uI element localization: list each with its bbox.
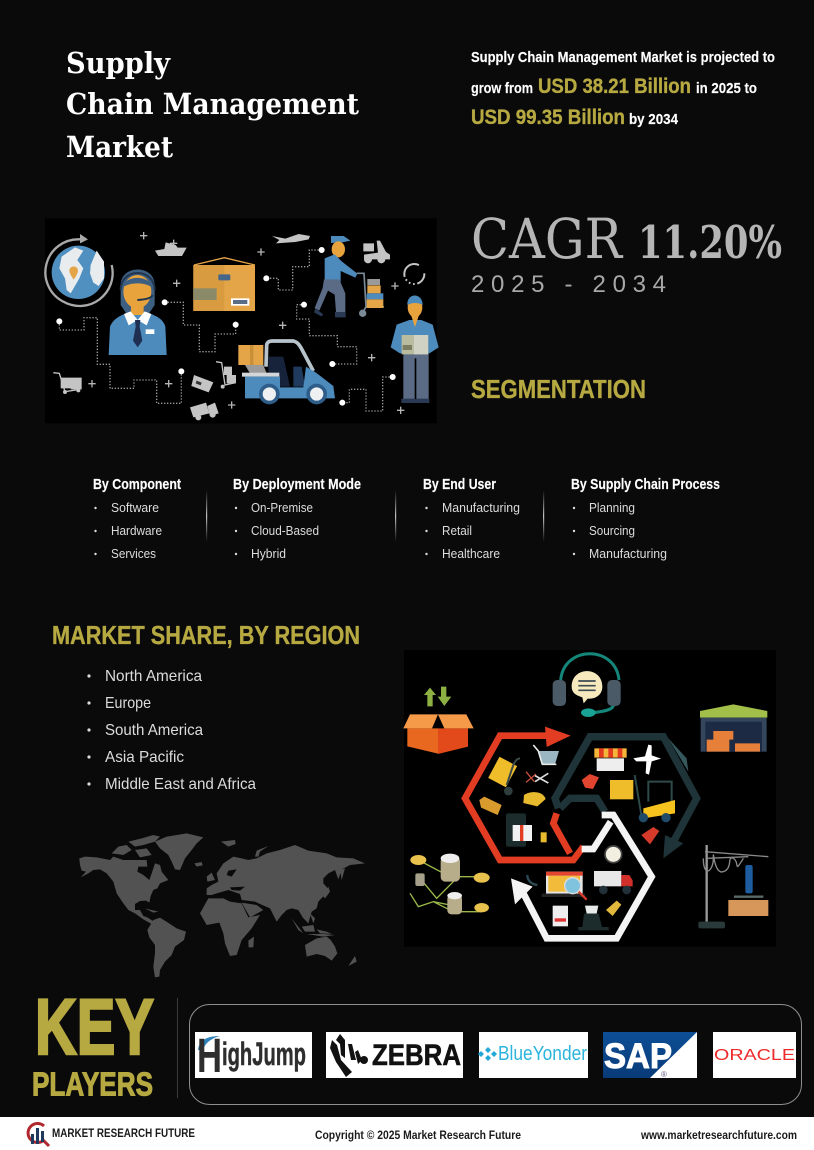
column: by deployment mode: By Deployment Mode — [233, 476, 361, 493]
logo: SAP: ® — [661, 1070, 667, 1079]
column: by end user: Manufacturing — [442, 500, 520, 515]
title: Chain Management — [66, 87, 360, 121]
column: by deployment mode: Cloud-Based — [251, 523, 319, 538]
title: Supply — [66, 46, 171, 80]
icons: retail cart and parcels — [479, 745, 559, 847]
hexagon arrow: white — [511, 815, 652, 938]
column: by supply chain process: By Supply Chain Process — [571, 476, 720, 493]
column: by supply chain process: Sourcing — [589, 523, 635, 538]
region list: Europe — [105, 695, 151, 712]
column: by deployment mode — [233, 476, 361, 561]
icons: delivery truck, search, clock — [527, 846, 633, 930]
title: Market — [66, 130, 174, 164]
icon: globe — [45, 234, 113, 306]
column: by end user: Retail — [442, 523, 472, 538]
icon: worker pushing cart — [314, 236, 384, 317]
market projection text: grow from — [471, 80, 533, 97]
footer: MARKET RESEARCH FUTURE — [52, 1126, 195, 1140]
logo: HighJump — [195, 1030, 312, 1083]
icon: market research future logo — [28, 1124, 49, 1146]
key players heading — [32, 982, 154, 1102]
icon: open orange box with arrows — [403, 687, 474, 754]
market projection text: by 2034 — [629, 111, 679, 128]
column: by component: Software — [111, 500, 159, 515]
logo: Oracle: ORACLE — [714, 1047, 795, 1064]
column: by end user: Healthcare — [442, 546, 500, 561]
hexagon arrow: dark teal — [555, 737, 697, 858]
logo: Zebra: ZEBRA — [372, 1039, 461, 1072]
column: by supply chain process: Planning — [589, 500, 635, 515]
icon: forklift truck with box — [238, 341, 335, 404]
column: by component — [93, 476, 181, 561]
market projection text — [471, 49, 775, 129]
logo: HighJump: H — [197, 1030, 222, 1083]
icon: headset with chat bubble — [553, 654, 621, 717]
column: by component: By Component — [93, 476, 181, 493]
section heading: segmentation: SEGMENTATION — [471, 374, 646, 404]
icon: delivery man holding parcel — [391, 295, 439, 403]
world map — [79, 833, 365, 977]
column: by supply chain process: Manufacturing — [589, 546, 667, 561]
key players panel — [190, 1004, 802, 1104]
region list: North America — [105, 668, 202, 685]
key players heading: PLAYERS — [32, 1066, 153, 1102]
region list: South America — [105, 722, 203, 739]
key players heading: KEY — [35, 982, 154, 1071]
CAGR figure: CAGR — [471, 207, 623, 271]
segmentation columns — [93, 476, 720, 561]
hexagon arrow: red — [465, 727, 583, 860]
icon: warehouse — [700, 704, 767, 752]
icons: small grey transport and parcel icons — [53, 234, 424, 420]
icon: call centre agent — [109, 269, 167, 355]
footer — [0, 1117, 814, 1150]
icon: crane hoist — [698, 845, 768, 928]
column: by component: Hardware — [111, 523, 162, 538]
logo: SAP — [603, 1032, 697, 1079]
region list: Asia Pacific — [105, 749, 184, 766]
icon: data coins network — [410, 854, 490, 914]
column: by deployment mode: On-Premise — [251, 500, 313, 515]
illustration: supply chain hexagon cycle — [403, 650, 776, 947]
region list: Middle East and Africa — [105, 776, 256, 793]
logo: Zebra — [326, 1032, 463, 1078]
market projection text: USD 99.35 Billion — [471, 106, 625, 129]
market projection text: USD 38.21 Billion — [538, 75, 691, 98]
column: by deployment mode: Hybrid — [251, 546, 286, 561]
column: by supply chain process — [571, 476, 720, 561]
logo: Oracle — [713, 1032, 796, 1078]
column: by component: Services — [111, 546, 156, 561]
region list — [87, 668, 256, 793]
logo: SAP: SAP — [604, 1037, 672, 1076]
logo: HighJump: ighJump — [222, 1036, 306, 1072]
column: by end user: By End User — [423, 476, 496, 493]
footer: Copyright © 2025 Market Research Future — [315, 1128, 521, 1142]
icons: store, plane, forklift — [582, 745, 675, 844]
logo: Blue Yonder: BlueYonder — [498, 1043, 587, 1065]
logo: Blue Yonder — [478, 1032, 588, 1078]
title — [66, 46, 360, 164]
section heading: market share by region: MARKET SHARE, BY REGION — [52, 620, 360, 650]
illustration: supply chain logistics — [45, 218, 439, 423]
market projection text: in 2025 to — [696, 80, 757, 97]
CAGR figure — [471, 207, 782, 298]
column: by end user — [423, 476, 520, 561]
market projection text: Supply Chain Management Market is projected to — [471, 49, 775, 66]
icon: cardboard box — [193, 258, 255, 311]
CAGR figure: 2025 - 2034 — [471, 271, 666, 298]
